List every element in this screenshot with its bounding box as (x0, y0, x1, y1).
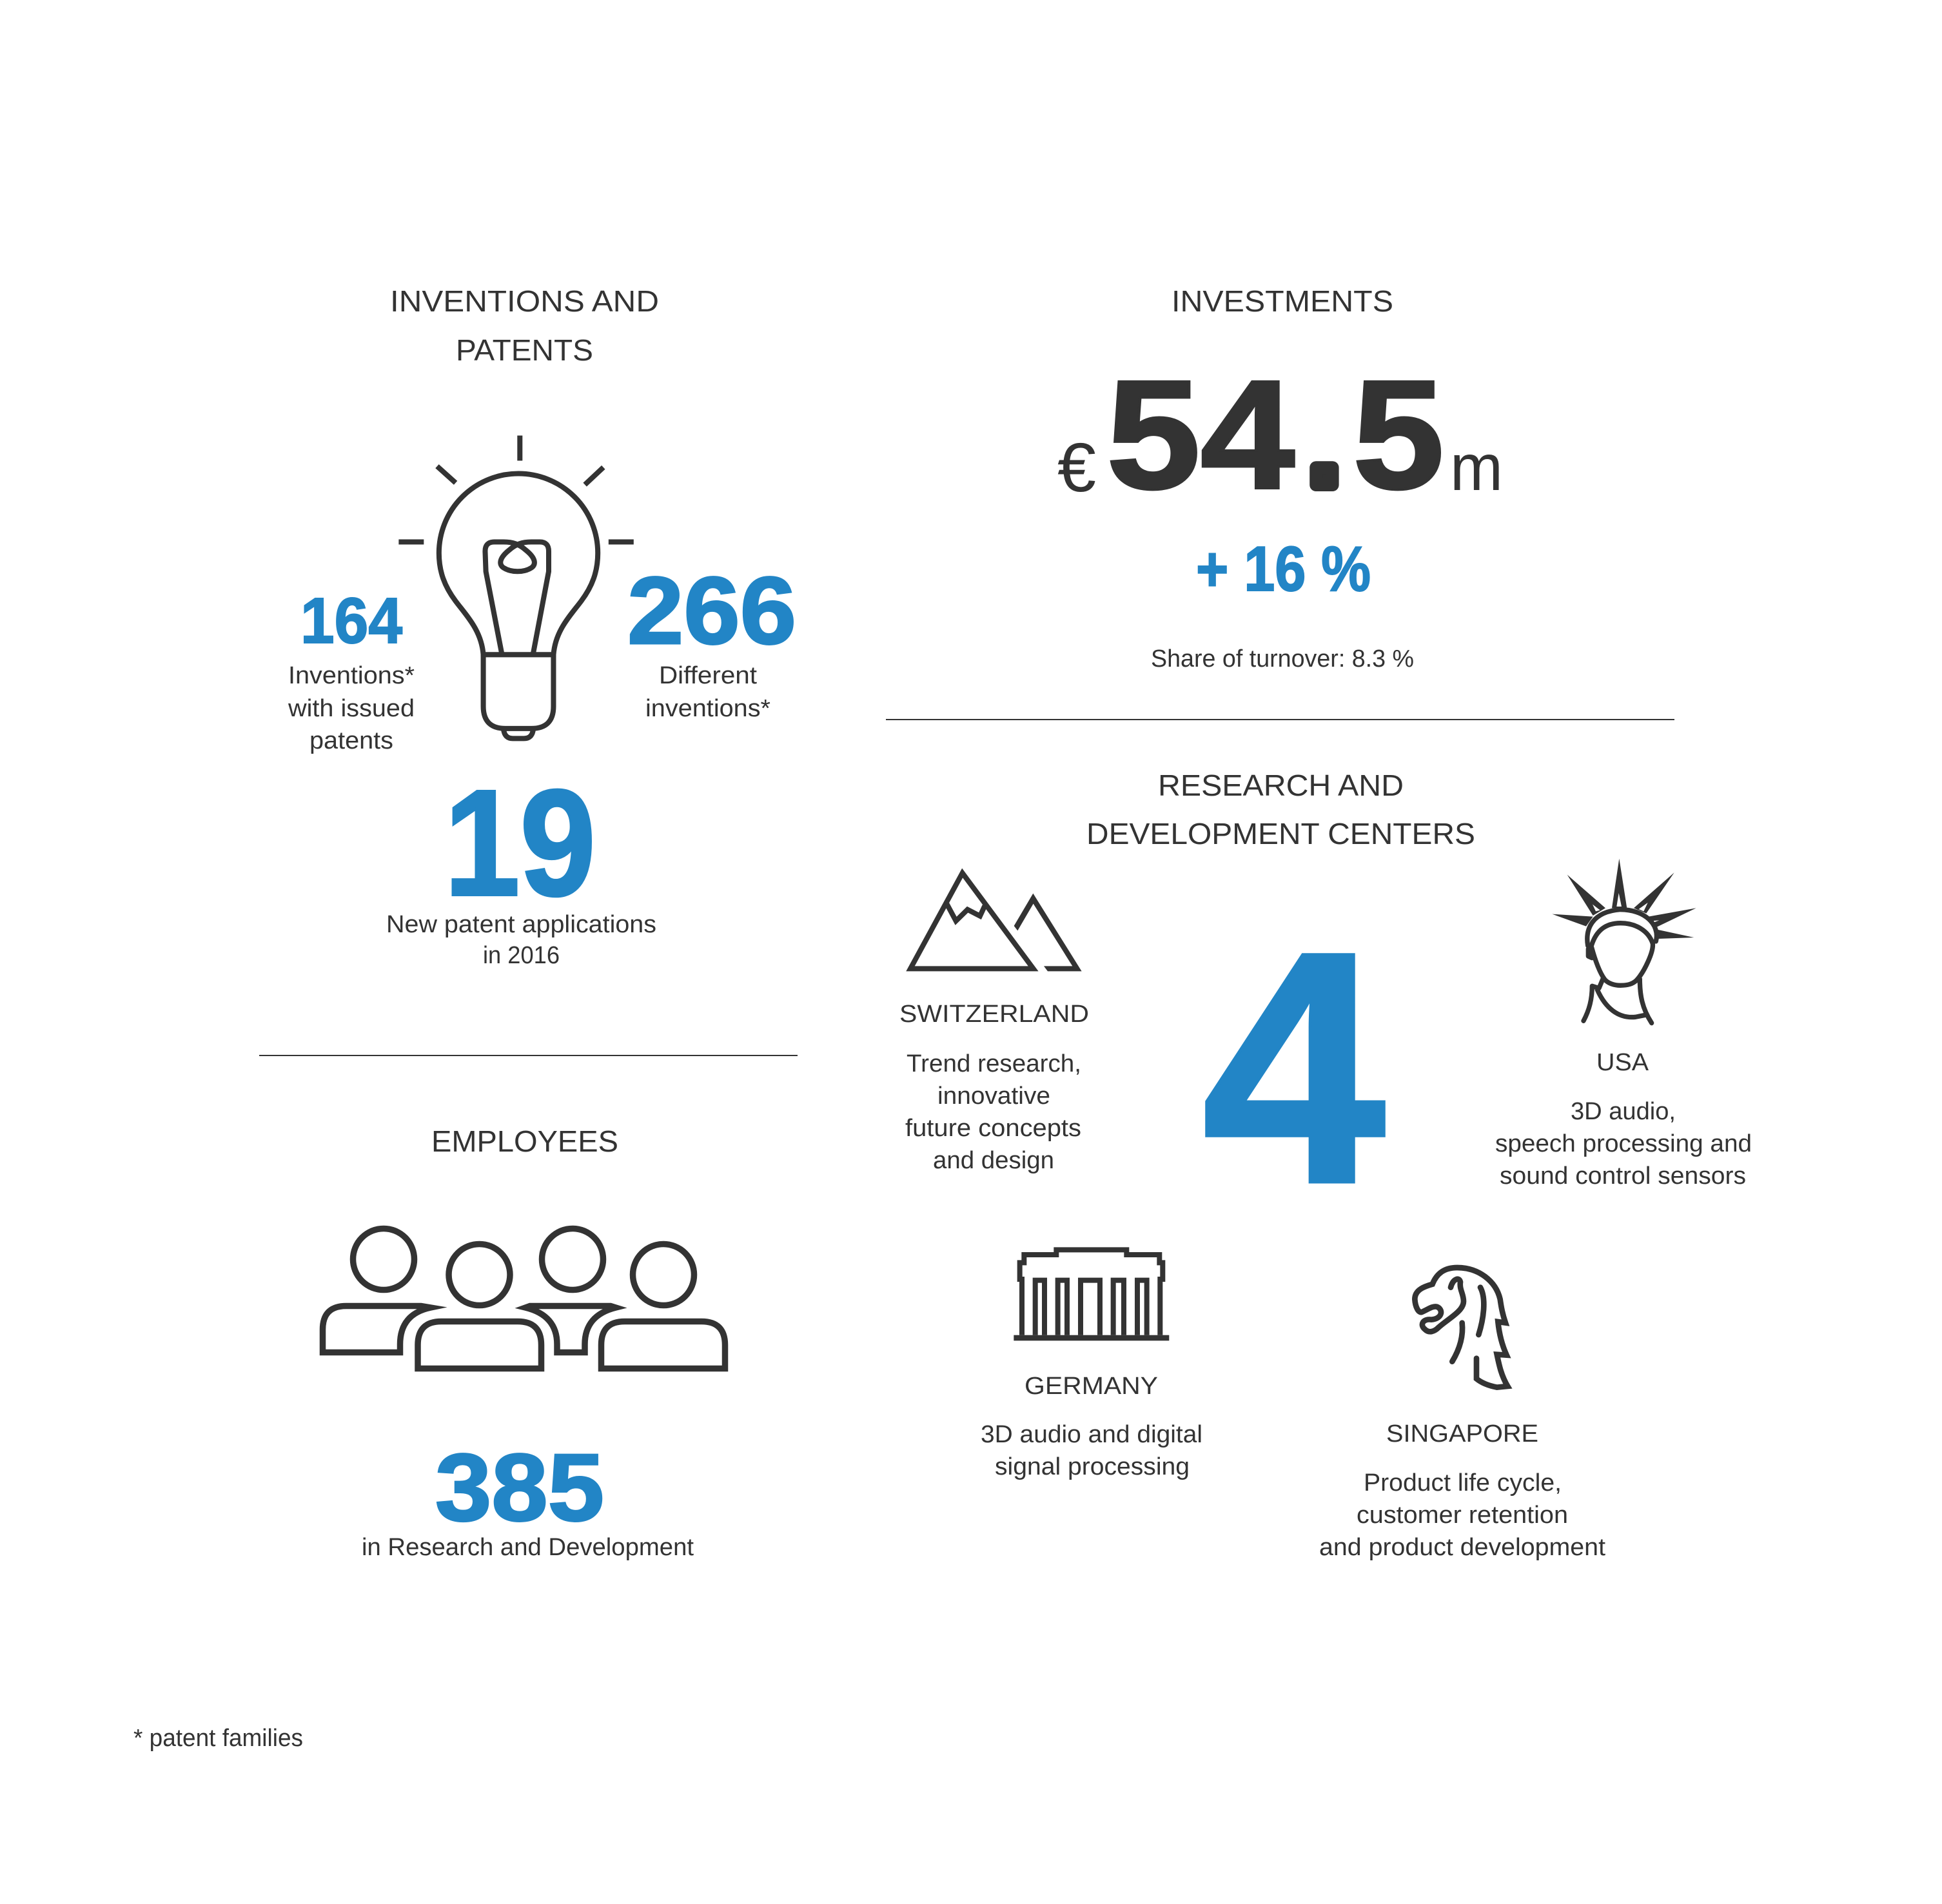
description: USA: sound control sensors (1500, 1163, 1746, 1190)
description: Switzerland: innovative (937, 1083, 1050, 1110)
stat: 164 inventions: patents (309, 727, 393, 754)
footnote: * patent families (133, 1725, 303, 1752)
stat: 266 different inventions: inventions* (645, 695, 770, 722)
stat: 266 different inventions (627, 558, 796, 722)
description: Switzerland: and design (933, 1147, 1054, 1174)
share of turnover: Share of turnover: 8.3 % (1151, 645, 1414, 672)
description: Germany: 3D audio and digital (981, 1421, 1202, 1448)
heading: employees: EMPLOYEES (431, 1124, 618, 1158)
panel: research and development centers (899, 769, 1752, 1561)
stat: 19 new patent applications (386, 758, 656, 969)
stat: 385 in research and development: in Research and Development (362, 1534, 694, 1561)
stat: 54.5 million euros: . (1308, 380, 1340, 510)
heading: research and development centers: DEVELOPMENT CENTERS (1086, 817, 1475, 850)
panel: inventions and patents (288, 284, 796, 969)
stat: 54.5 million euros: m (1450, 431, 1503, 504)
stat: 164 inventions (288, 585, 415, 754)
icon: merlion (1415, 1268, 1507, 1388)
stat: 19 new patent applications: 19 (444, 758, 596, 927)
label: Germany: GERMANY (1025, 1373, 1158, 1400)
center: Germany (981, 1250, 1202, 1480)
panel: investments (1057, 284, 1503, 672)
description: Switzerland: future concepts (905, 1115, 1081, 1142)
description: Switzerland: Trend research, (907, 1050, 1081, 1077)
description: Singapore (1319, 1469, 1605, 1561)
description: Singapore: customer retention (1357, 1502, 1568, 1529)
stat: 19 new patent applications: New patent applications (386, 911, 656, 938)
stat: 54.5 million euros (1057, 348, 1503, 521)
description: USA (1495, 1098, 1752, 1190)
stat: 164 inventions: 164 (300, 585, 402, 657)
label: USA: USA (1596, 1049, 1649, 1076)
description: Singapore: Product life cycle, (1364, 1469, 1562, 1497)
heading: research and development centers: RESEARCH AND (1158, 769, 1404, 802)
panel: employees (322, 1124, 725, 1561)
icon: Brandenburg gate (1014, 1250, 1169, 1340)
icon: light bulb (398, 436, 634, 738)
icon: statue of liberty (1552, 859, 1696, 1023)
icon: group of people (322, 1229, 725, 1368)
heading: inventions and patents: PATENTS (456, 333, 593, 367)
stat: 266 different inventions: 266 (627, 558, 796, 664)
description: Germany: signal processing (995, 1453, 1190, 1480)
stat: 385 in research and development (362, 1435, 694, 1561)
heading: inventions and patents: INVENTIONS AND (390, 284, 659, 318)
description: Germany (981, 1421, 1202, 1480)
icon: mountains (910, 873, 1082, 971)
stat: 164 inventions: Inventions* (288, 662, 415, 689)
description: Singapore: and product development (1319, 1534, 1605, 1561)
description: USA: speech processing and (1495, 1130, 1752, 1157)
stat: 54.5 million euros: € (1057, 428, 1096, 506)
heading: investments: INVESTMENTS (1172, 284, 1393, 318)
description: USA: 3D audio, (1571, 1098, 1676, 1125)
stat: 266 different inventions: Different (659, 662, 757, 689)
stat: 385 in research and development: 385 (435, 1435, 604, 1541)
stat: 54.5 million euros: 54 (1106, 348, 1295, 521)
label: Singapore: SINGAPORE (1386, 1420, 1538, 1448)
stat: 19 new patent applications: in 2016 (483, 942, 560, 969)
heading: inventions and patents (390, 284, 659, 367)
center: Singapore (1319, 1268, 1605, 1561)
stat: plus 16 percent: + 16 % (1196, 533, 1371, 604)
stat: 54.5 million euros: 5 (1353, 348, 1444, 521)
label: Switzerland: SWITZERLAND (899, 1001, 1089, 1028)
center: USA (1495, 859, 1752, 1190)
heading: research and development centers (1086, 769, 1475, 850)
description: Switzerland (905, 1050, 1081, 1174)
center: Switzerland (899, 873, 1089, 1174)
stat: 164 inventions: with issued (288, 695, 415, 722)
big number 4: 4 (1202, 883, 1388, 1252)
